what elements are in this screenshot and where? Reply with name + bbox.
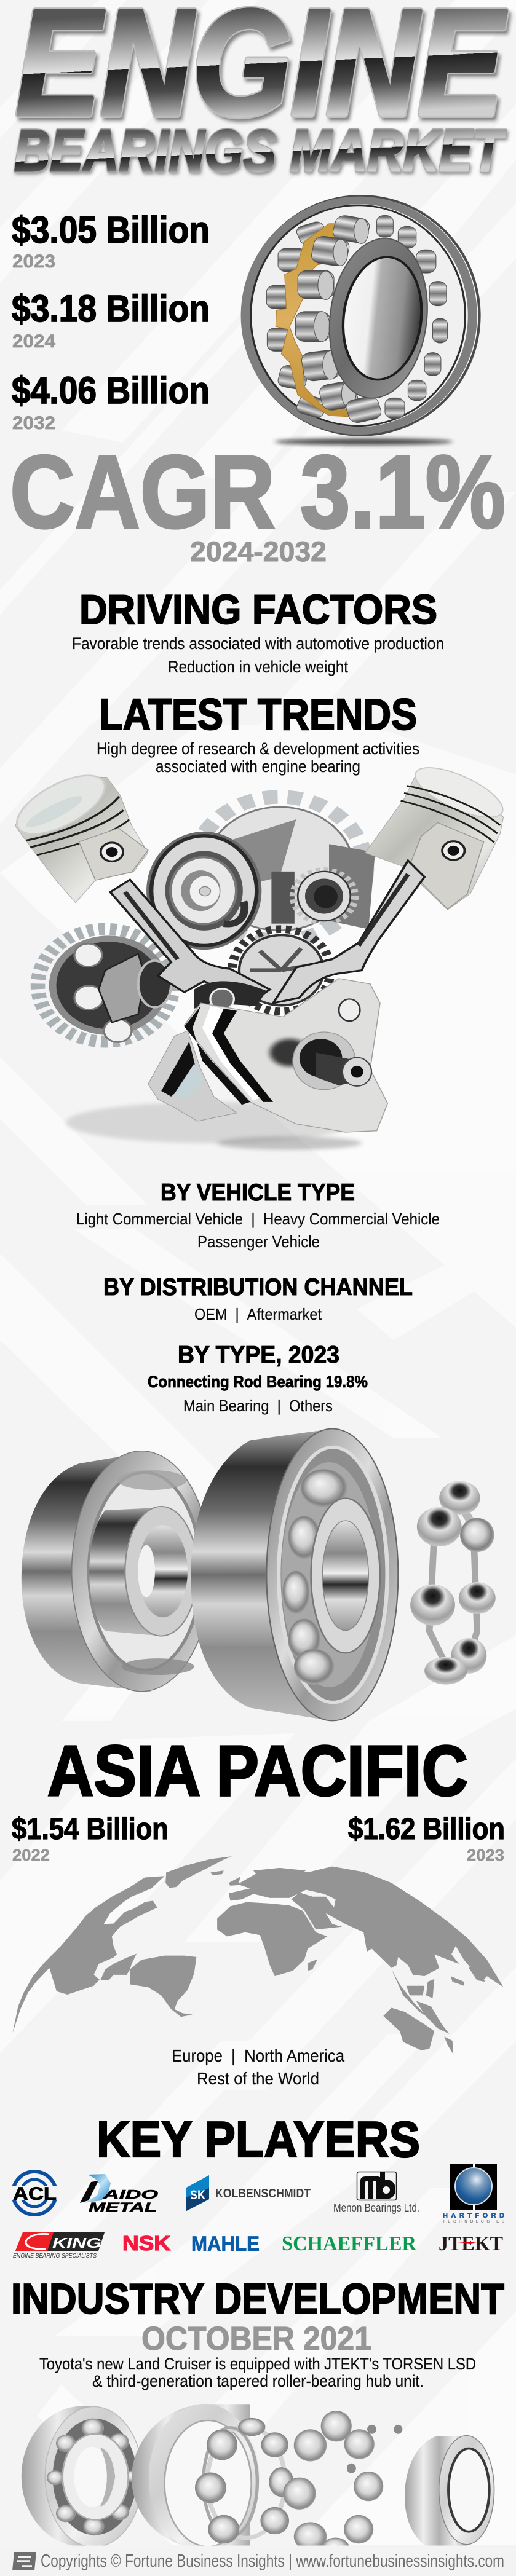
section: latest trends <box>97 691 419 776</box>
illustration: V engine with pistons, gears and crankshaft <box>6 758 511 1150</box>
loose balls <box>283 2411 383 2558</box>
illustration: disassembled ball bearing <box>22 1429 398 1721</box>
development description: & third-generation tapered roller-bearing hub unit. <box>92 2372 424 2390</box>
stat: 2024 market size: $3.18 Billion <box>12 288 210 329</box>
stat: 2032 market size <box>12 369 210 433</box>
forecast period: 2024-2032 <box>190 536 327 567</box>
logo: NSK: NSK <box>122 2232 170 2255</box>
loose ball set <box>410 1481 496 1685</box>
logo: King Engine Bearings: ENGINE BEARING SPECIALISTS <box>13 2253 97 2259</box>
development description <box>39 2355 476 2390</box>
logo: Kolbenschmidt: KOLBENSCHMIDT <box>215 2187 311 2200</box>
section: driving factors <box>72 586 444 676</box>
left piston <box>6 764 148 903</box>
hub gear <box>146 832 261 950</box>
world map <box>12 1856 504 2054</box>
stat: 2023 market size <box>12 209 210 272</box>
illustration: brass cage roller bearing <box>242 196 479 445</box>
left toothed gear <box>38 929 173 1042</box>
regional value 2022: 2022 <box>12 1846 50 1864</box>
section: by vehicle type: Passenger Vehicle <box>197 1232 320 1251</box>
logo: Hartford Technologies: TECHNOLOGIES <box>443 2220 504 2224</box>
left bearing <box>21 2406 90 2546</box>
ground shadow <box>66 1102 362 1150</box>
logo: Kolbenschmidt: SK <box>190 2188 205 2202</box>
region list: Rest of the World <box>197 2069 319 2088</box>
logo: Menon Bearings: Menon Bearings Ltd. <box>333 2202 419 2214</box>
stat: 2023 market size: 2023 <box>12 251 55 272</box>
section: by vehicle type: BY VEHICLE TYPE <box>161 1180 355 1206</box>
illustration: exploded ball bearing <box>22 2404 494 2558</box>
section: by type 2023 <box>148 1342 368 1415</box>
connecting rods and crank <box>110 861 424 1132</box>
region list: Europe | North America <box>172 2046 344 2065</box>
development description: Toyota's new Land Cruiser is equipped with JTEKT's TORSEN LSD <box>39 2355 476 2373</box>
balls in the race <box>300 1469 347 1508</box>
logo: King Engine Bearings <box>13 2232 105 2259</box>
back gear and hubs <box>38 797 375 1042</box>
logo: Hartford Technologies <box>443 2164 504 2224</box>
logo: Daido Metal <box>80 2174 159 2215</box>
section: latest trends: High degree of research & development activities <box>97 739 419 758</box>
section: by type 2023: Connecting Rod Bearing 19.8% <box>148 1373 368 1391</box>
logo: Mahle: MAHLE <box>191 2232 260 2256</box>
section: by vehicle type <box>76 1180 440 1251</box>
cage with cups <box>207 2426 285 2538</box>
section: by distribution channel <box>103 1274 413 1323</box>
right ring <box>405 2436 467 2551</box>
headline: Asia Pacific: ASIA PACIFIC <box>47 1731 468 1811</box>
front inner ring <box>311 1498 380 1653</box>
regional value 2022 <box>12 1813 169 1864</box>
logo: Daido Metal: AIDO <box>102 2188 159 2202</box>
section: driving factors: Favorable trends associated with automotive production <box>72 634 444 653</box>
logo: ACL: ACL <box>13 2184 57 2204</box>
right gear <box>271 872 295 924</box>
brass cage <box>276 224 359 417</box>
region list <box>172 2046 344 2088</box>
section: driving factors: Reduction in vehicle weight <box>168 658 349 676</box>
logo: Daido Metal: METAL <box>89 2200 157 2215</box>
rear outer ring <box>22 1451 151 1692</box>
development date: OCTOBER 2021 <box>141 2320 371 2357</box>
section: latest trends: associated with engine bearing <box>156 757 360 776</box>
logo: King Engine Bearings: KING <box>52 2235 101 2251</box>
hollow outer ring <box>132 2404 250 2550</box>
section: latest trends: LATEST TRENDS <box>99 691 417 739</box>
stat: 2024 market size <box>12 288 210 352</box>
right piston <box>365 758 511 910</box>
stat: 2024 market size: 2024 <box>12 331 55 352</box>
logo: Hartford Technologies: HARTFORD <box>443 2212 504 2220</box>
back rollers <box>266 215 448 419</box>
footer <box>0 2546 516 2576</box>
section: by type 2023: BY TYPE, 2023 <box>178 1342 339 1368</box>
logo: JTEKT: JTEKT <box>439 2232 503 2255</box>
rear inner ring <box>89 1508 161 1636</box>
section: by vehicle type: Light Commercial Vehicle | Heavy Commercial Vehicle <box>76 1210 440 1228</box>
logo: Schaeffler: SCHAEFFLER <box>282 2232 416 2255</box>
section: by type 2023: Main Bearing | Others <box>183 1396 333 1415</box>
lower right gear <box>232 929 331 1012</box>
regional value 2023: 2023 <box>467 1846 504 1864</box>
logo: Kolbenschmidt <box>186 2175 311 2211</box>
heading: key players: KEY PLAYERS <box>97 2111 420 2168</box>
regional value 2022: $1.54 Billion <box>12 1813 169 1846</box>
stat: 2032 market size: 2032 <box>12 413 55 433</box>
logo: Menon Bearings <box>333 2172 419 2214</box>
front outer ring <box>191 1429 332 1721</box>
section: by distribution channel: OEM | Aftermarket <box>194 1305 322 1323</box>
stat: 2032 market size: $4.06 Billion <box>12 369 210 411</box>
regional value 2023 <box>348 1813 505 1864</box>
stat: 2023 market size: $3.05 Billion <box>12 209 210 251</box>
section: driving factors: DRIVING FACTORS <box>79 586 437 633</box>
footer logo <box>12 2552 36 2570</box>
section: by distribution channel: BY DISTRIBUTION CHANNEL <box>103 1274 413 1301</box>
logo: ACL <box>11 2172 59 2215</box>
inner race <box>322 235 435 401</box>
front rollers <box>295 214 383 424</box>
